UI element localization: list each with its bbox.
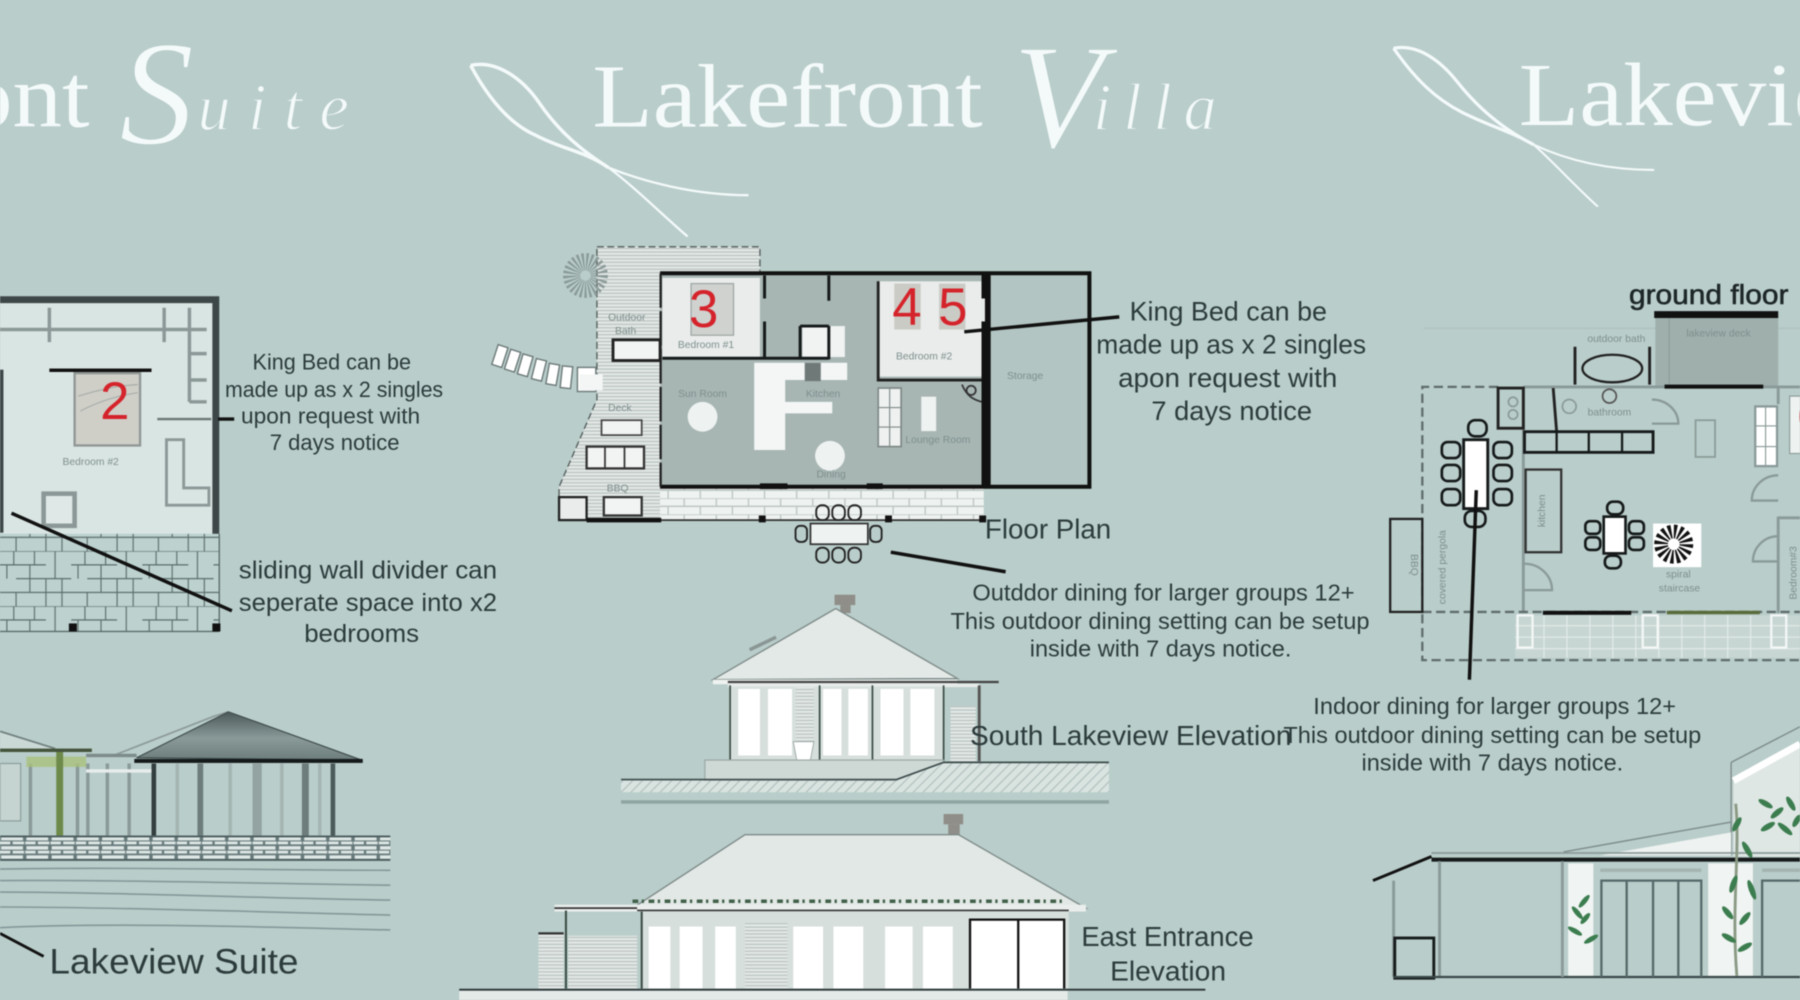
callout line: king bed villa [964,317,1119,332]
floor plan: Lakeview ground floor: covered pergola [1437,530,1448,604]
floor plan: Lakefront Villa: 5 [938,278,967,337]
text: sliding wall note: sliding wall divider can [239,558,497,585]
text: king bed note left: King Bed can be [253,350,411,375]
text: king bed note villa: made up as x 2 singles [1096,330,1366,360]
text: outdoor dining note: Outddor dining for larger groups 12+ [972,579,1355,605]
label: floor plan: Floor Plan [985,513,1111,544]
text: sliding wall note [239,558,497,648]
floor plan: Lakefront Villa: BBQ [607,483,629,494]
label: South Lakeview Elevation: South Lakeview Elevation [970,720,1291,751]
floor plan: Lakefront Suite bedroom: Bedroom #2 [63,457,119,468]
floor plan: Lakefront Villa: Bedroom #2 [896,351,952,362]
floor plan: Lakefront Villa: Deck [608,403,632,414]
callout line: indoor dining [1469,490,1476,680]
text: outdoor dining note: This outdoor dining setting can be setup [951,608,1370,634]
floor plan: Lakefront Suite bedroom [0,299,220,631]
title: Lakefront Suite: S [119,12,194,177]
floor plan: Lakeview ground floor: kitchen [1537,494,1548,527]
floor plan: Lakefront Villa: Kitchen [806,389,841,400]
floor plan: Lakefront Villa: 3 [689,280,718,339]
title: Lakeview with leaf [1394,46,1800,207]
callout line: outdoor dining [891,552,1006,572]
floor plan: Lakeview ground floor [1390,311,1800,660]
elevation: Lakeview right [1373,727,1800,978]
text: king bed note villa: 7 days notice [1151,396,1312,426]
text: king bed note left [225,350,443,455]
floor plan: Lakeview ground floor: BBQ [1408,554,1419,576]
floor plan: Lakeview ground floor: spiral [1666,569,1691,580]
floor plan: Lakeview ground floor: outdoor bath [1587,334,1646,345]
title: Lakefront Villa with leaf: Lakefront [592,47,983,146]
text: king bed note left: upon request with [241,404,420,429]
title: Lakefront Suite [0,12,349,177]
floor plan: Lakefront Villa [492,247,1089,563]
floor plan: Lakefront Villa: 4 [892,278,922,337]
text: king bed note villa: apon request with [1118,363,1337,393]
text: outdoor dining note: inside with 7 days notice. [1030,636,1291,662]
floor plan: Lakefront Villa: Storage [1007,371,1043,382]
elevation: South Lakeview [621,595,1109,804]
floor plan: Lakeview ground floor: bathroom [1588,408,1631,419]
title: Lakefront Suite: uite [197,72,349,145]
title: Lakefront Villa with leaf: V [1013,15,1118,180]
floor plan: Lakeview ground floor: Bedroom#3 [1789,546,1800,600]
elevation: Lakeview Suite [0,712,390,930]
floor plan: Lakefront Villa: Dining [816,470,846,481]
text: outdoor dining note [951,579,1370,662]
text: indoor dining note [1283,693,1701,775]
title: Lakefront Villa with leaf: illa [1093,72,1217,145]
callout line: sliding wall [11,513,232,611]
text: indoor dining note: This outdoor dining setting can be setup [1283,722,1701,748]
label: East Entrance Elevation [1081,921,1254,986]
text: king bed note left: 7 days notice [270,430,399,455]
floor plan: Lakefront Villa: Bath [615,326,637,337]
elevation: East Entrance [459,814,1205,1000]
floor plan: Lakefront Villa: Lounge Room [905,435,970,446]
floor plan: Lakefront Suite bedroom: 2 [100,372,129,431]
text: indoor dining note: inside with 7 days notice. [1361,749,1623,775]
floor plan: Lakeview ground floor: staircase [1659,583,1700,594]
label: ground floor: ground floor [1629,279,1789,310]
label: Lakeview Suite: Lakeview Suite [49,942,298,982]
callout line: king bed left [218,418,234,421]
title: Lakefront Villa with leaf [471,15,1217,237]
label: East Entrance Elevation: Elevation [1110,955,1226,986]
label: East Entrance Elevation: East Entrance [1081,921,1254,952]
floor plan: Lakefront Villa: Sun Room [678,389,727,400]
text: king bed note villa [1096,296,1366,426]
floor plan: Lakefront Villa: Outdoor [608,312,646,323]
callout line: Lakeview Suite [0,933,44,956]
text: sliding wall note: bedrooms [304,621,419,648]
text: sliding wall note: seperate space into x2 [239,590,497,617]
text: indoor dining note: Indoor dining for larger groups 12+ [1313,693,1676,719]
floor plan: Lakeview ground floor: lakeview deck [1686,328,1751,339]
text: king bed note villa: King Bed can be [1130,296,1327,326]
floor plan: Lakefront Villa: Bedroom #1 [678,340,734,351]
text: king bed note left: made up as x 2 singles [225,377,443,402]
